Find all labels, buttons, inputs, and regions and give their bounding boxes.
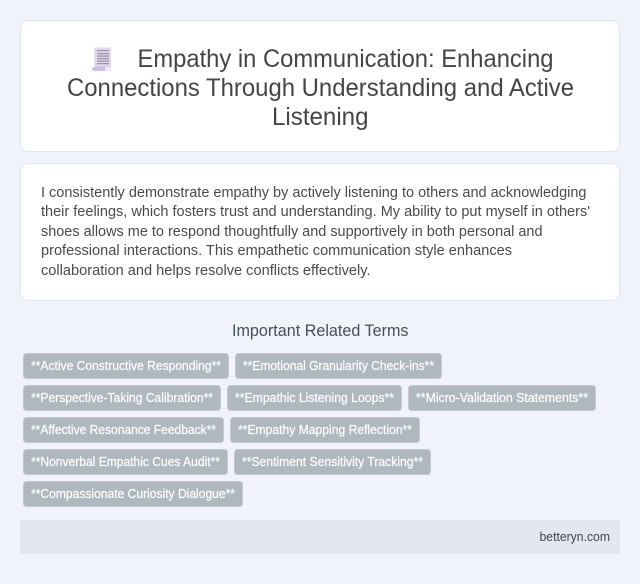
tag: **Sentiment Sensitivity Tracking** — [242, 455, 423, 469]
tag: **Micro-Validation Statements** — [416, 391, 588, 405]
footer bar — [20, 520, 620, 554]
description text: collaboration and helps resolve conflicts effectively. — [41, 262, 370, 279]
tag: **Compassionate Curiosity Dialogue** — [31, 487, 235, 501]
title text: Listening — [272, 103, 368, 131]
tag: **Active Constructive Responding** — [31, 359, 221, 373]
description text: their feelings, which fosters trust and understanding. My ability to put myself in others' — [41, 203, 590, 220]
tag — [24, 482, 242, 506]
tag — [234, 450, 430, 474]
panel: title card — [20, 20, 620, 152]
icon: scroll — [92, 48, 111, 71]
tag: **Perspective-Taking Calibration** — [31, 391, 213, 405]
tag — [236, 354, 442, 378]
description text: I consistently demonstrate empathy by actively listening to others and acknowledging — [41, 184, 586, 201]
tag: **Empathy Mapping Reflection** — [238, 423, 412, 437]
tag: **Affective Resonance Feedback** — [31, 423, 216, 437]
title text — [67, 45, 574, 131]
tag — [408, 386, 596, 410]
panel: description card — [20, 164, 620, 300]
footer text: betteryn.com — [540, 530, 610, 544]
tag — [24, 450, 228, 474]
title text: Empathy in Communication: Enhancing — [138, 45, 554, 73]
tag — [24, 354, 228, 378]
tag — [24, 386, 220, 410]
description text: professional interactions. This empathetic communication style enhances — [41, 242, 512, 259]
tag: **Empathic Listening Loops** — [235, 391, 394, 405]
tag — [228, 386, 402, 410]
description text: shoes allows me to respond thoughtfully and supportively in both personal and — [41, 223, 542, 240]
tag — [230, 418, 420, 442]
title text: Connections Through Understanding and Active — [67, 74, 574, 102]
heading: related terms: Important Related Terms — [232, 322, 408, 340]
tag group: related terms — [24, 354, 596, 506]
tag: **Nonverbal Empathic Cues Audit** — [31, 455, 220, 469]
description text — [41, 184, 590, 279]
tag: **Emotional Granularity Check-ins** — [243, 359, 434, 373]
tag — [24, 418, 224, 442]
